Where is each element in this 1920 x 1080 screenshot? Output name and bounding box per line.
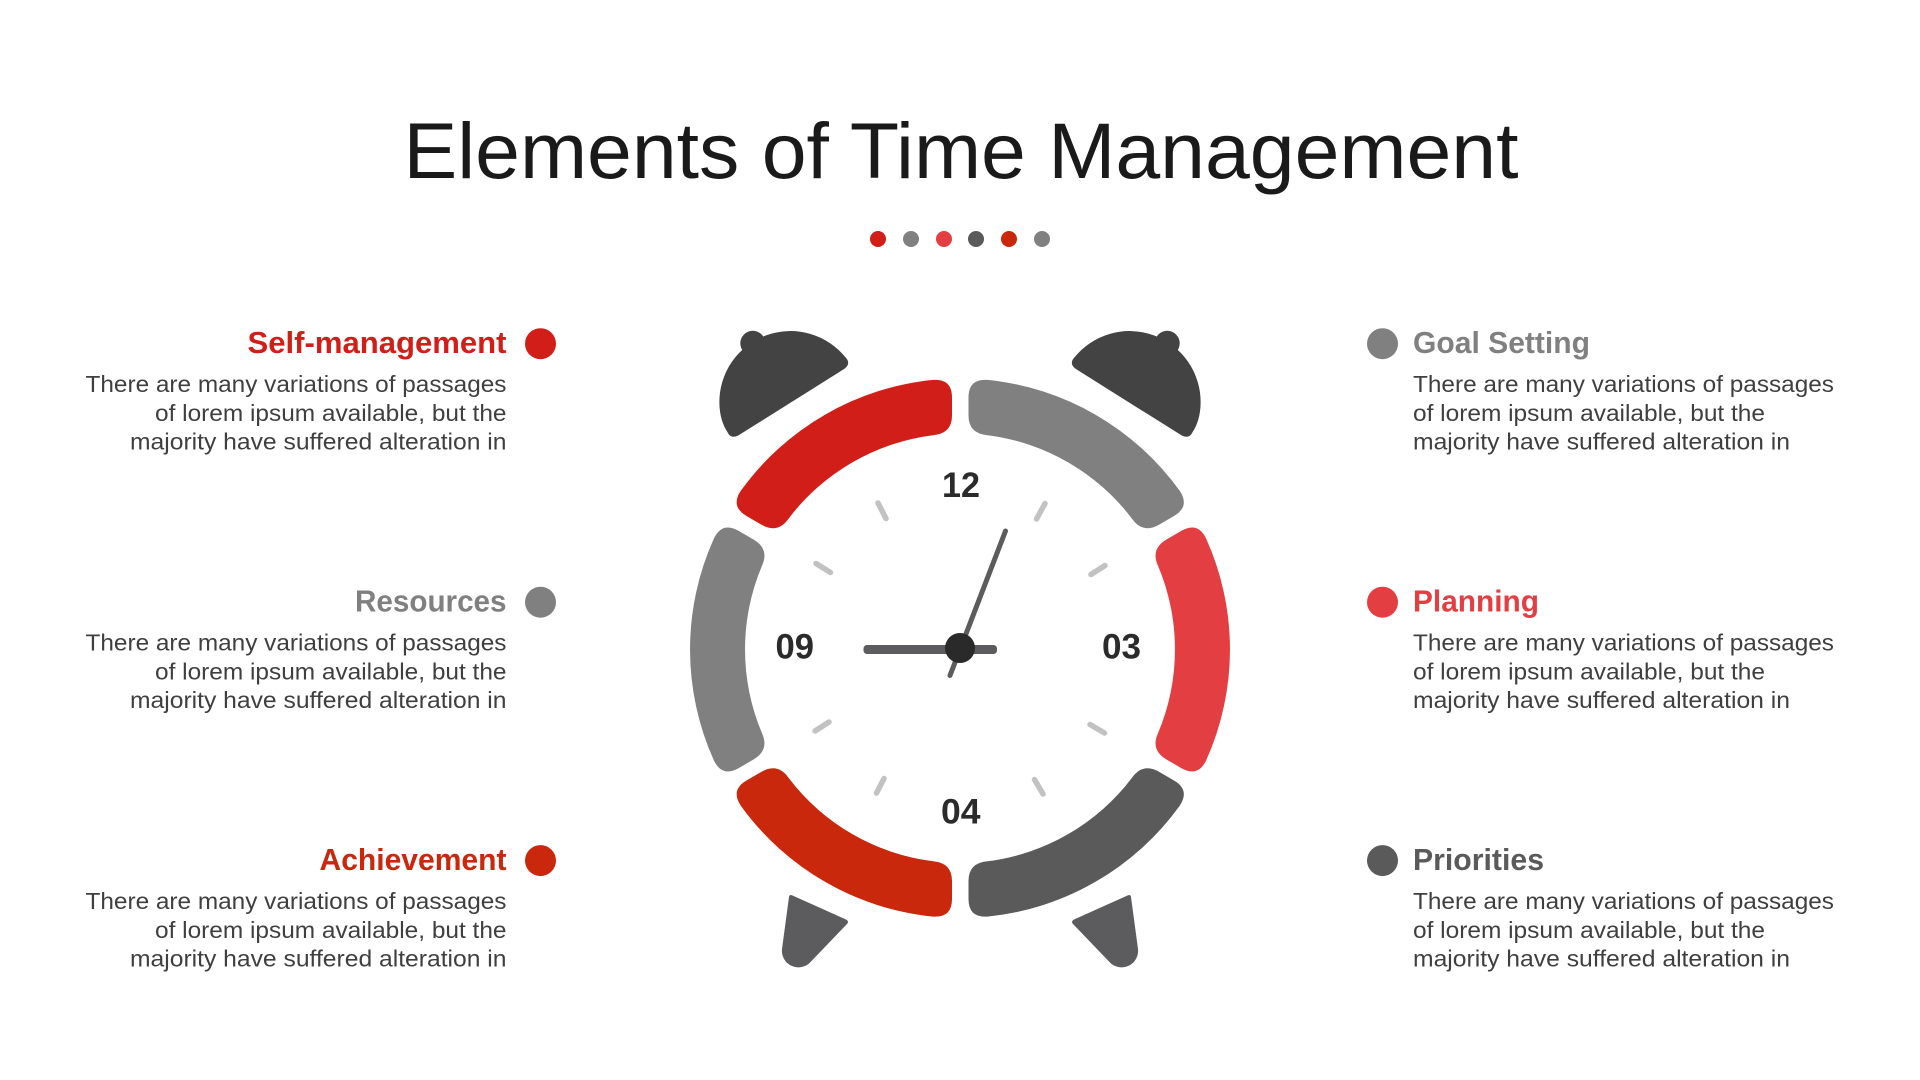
marker: planning [1367,587,1398,618]
text: goal setting description: of lorem ipsum available, but the [1413,400,1765,426]
panel: achievement [86,842,556,972]
marker: self-management [525,328,556,359]
text: resources description [86,630,506,713]
text: goal setting description: There are many variations of passages [1413,371,1834,397]
text: resources description: There are many variations of passages [86,630,506,656]
text: achievement description: of lorem ipsum available, but the [155,917,506,943]
text: goal setting description: majority have suffered alteration in [1413,428,1790,454]
text: achievement description [86,888,506,972]
clock number 12: 12 [942,466,980,505]
text: resources description: majority have suffered alteration in [130,687,506,713]
text: planning description: There are many variations of passages [1413,630,1834,656]
text: priorities description [1413,888,1834,972]
marker: priorities [1367,845,1398,876]
heading: achievement: Achievement [320,842,506,877]
text: goal setting description [1413,371,1834,454]
decorative dot row [870,231,1050,247]
clock hub [945,633,975,663]
text: planning description: of lorem ipsum available, but the [1413,658,1765,684]
text: planning description [1413,630,1834,713]
marker: goal setting [1367,328,1398,359]
panel: resources [86,584,556,713]
ring segment: goal setting [968,380,1184,528]
text: planning description: majority have suffered alteration in [1413,687,1790,713]
heading: resources: Resources [355,584,506,618]
marker: achievement [525,845,556,876]
text: achievement description: There are many variations of passages [86,888,506,914]
ring segment: achievement [737,768,952,917]
clock tick marks [815,503,1105,794]
ring segment: resources [690,528,764,771]
clock number 09: 09 [776,628,814,666]
text: self-management description: of lorem ipsum available, but the [155,400,506,426]
text: self-management description: majority have suffered alteration in [130,428,506,454]
text: self-management description: There are many variations of passages [86,371,506,397]
panel: priorities [1367,842,1834,972]
icon: left bell [719,331,848,437]
text: priorities description: of lorem ipsum available, but the [1413,917,1765,943]
text: resources description: of lorem ipsum available, but the [155,658,506,684]
panel: goal setting [1367,325,1834,454]
clock hour hand [864,645,997,654]
panel: self-management [86,325,556,454]
heading: goal setting: Goal Setting [1413,325,1590,360]
panel: planning [1367,584,1834,713]
heading: self-management: Self-management [248,325,506,360]
heading: planning: Planning [1413,584,1539,618]
clock number 03: 03 [1102,628,1141,666]
text: achievement description: majority have suffered alteration in [130,946,506,972]
title: Elements of Time Management [404,106,1519,195]
chart: alarm clock [690,331,1230,967]
ring segment: planning [1156,528,1230,771]
icon: left foot [782,895,848,967]
text: priorities description: There are many variations of passages [1413,888,1834,914]
icon: right bell [1072,331,1201,437]
clock number 04: 04 [941,792,981,832]
marker: resources [525,587,556,618]
text: priorities description: majority have suffered alteration in [1413,946,1790,972]
heading: priorities: Priorities [1413,842,1544,877]
text: self-management description [86,371,506,454]
clock minute hand [950,531,1006,676]
ring segment: priorities [968,768,1184,917]
ring segment: self-management [737,380,952,528]
icon: right foot [1072,895,1138,967]
